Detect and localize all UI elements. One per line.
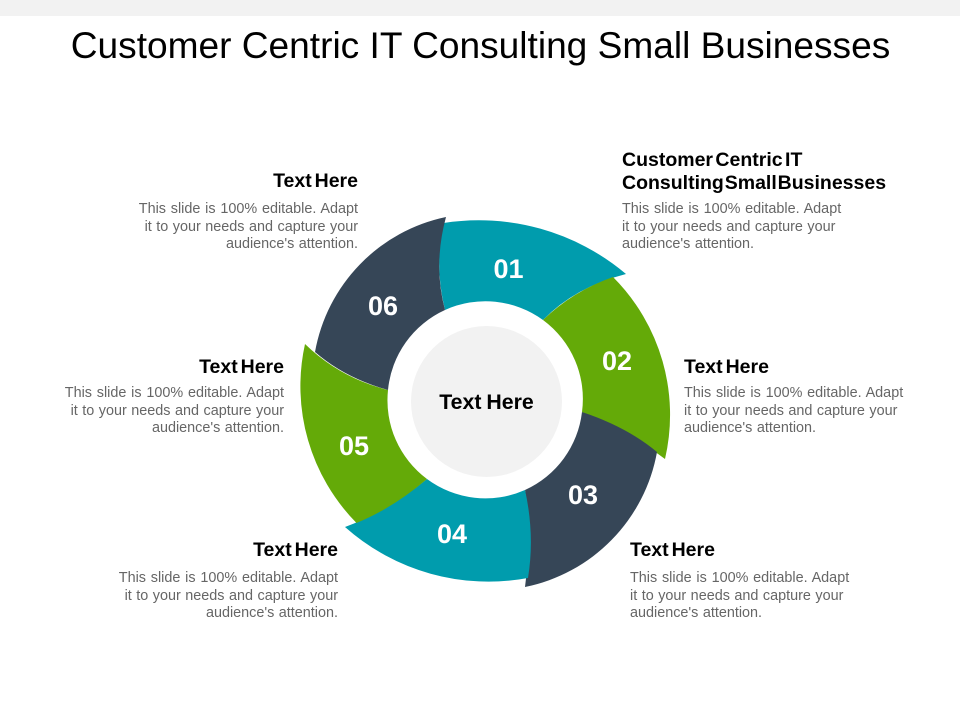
text block 05: Text Here <box>199 356 284 378</box>
text block 01: This slide is 100% editable. Adapt <box>622 201 841 217</box>
text block 04 <box>119 539 338 621</box>
segment 05: 05 <box>339 431 369 461</box>
text block 02: it to your needs and capture your <box>684 403 898 419</box>
segment 04 <box>345 479 531 582</box>
text block 03: Text Here <box>630 539 715 561</box>
text block 01: Consulting Small Businesses <box>622 172 886 194</box>
segment 06 <box>315 217 446 390</box>
center circle: Text Here <box>439 390 534 414</box>
text block 04: it to your needs and capture your <box>125 588 338 604</box>
text block 03: audience's attention. <box>630 605 762 621</box>
segment 04: 04 <box>437 519 467 549</box>
text block 03: This slide is 100% editable. Adapt <box>630 570 849 586</box>
text block 03 <box>630 539 849 621</box>
segment 05 <box>300 344 427 523</box>
text block 02: audience's attention. <box>684 420 816 436</box>
text block 05: This slide is 100% editable. Adapt <box>65 385 284 401</box>
text block 05: audience's attention. <box>152 420 284 436</box>
text block 01: audience's attention. <box>622 236 754 252</box>
text block 04: This slide is 100% editable. Adapt <box>119 570 338 586</box>
segment 06: 06 <box>368 291 398 321</box>
text block 01: Customer Centric IT <box>622 149 802 171</box>
text block 06 <box>139 170 358 252</box>
text block 04: audience's attention. <box>206 605 338 621</box>
text block 02: This slide is 100% editable. Adapt <box>684 385 903 401</box>
segment 01: 01 <box>493 254 524 284</box>
text block 02: Text Here <box>684 356 769 378</box>
text block 01: it to your needs and capture your <box>622 219 836 235</box>
text block 02 <box>684 356 903 436</box>
text block 05 <box>65 356 284 436</box>
text block 06: Text Here <box>273 170 358 192</box>
title: Customer Centric IT Consulting Small Businesses <box>71 24 890 66</box>
text block 06: This slide is 100% editable. Adapt <box>139 201 358 217</box>
center circle <box>411 326 562 477</box>
text block 06: it to your needs and capture your <box>145 219 358 235</box>
donut cycle diagram <box>300 217 670 587</box>
segment 02: 02 <box>602 346 632 376</box>
segment 03: 03 <box>568 480 598 510</box>
segment 01 <box>439 220 626 320</box>
segment 03 <box>525 412 657 587</box>
text block 05: it to your needs and capture your <box>71 403 284 419</box>
text block 04: Text Here <box>253 539 338 561</box>
text block 06: audience's attention. <box>226 236 358 252</box>
text block 01 <box>622 149 886 252</box>
segment 02 <box>543 277 670 459</box>
text block 03: it to your needs and capture your <box>630 588 844 604</box>
